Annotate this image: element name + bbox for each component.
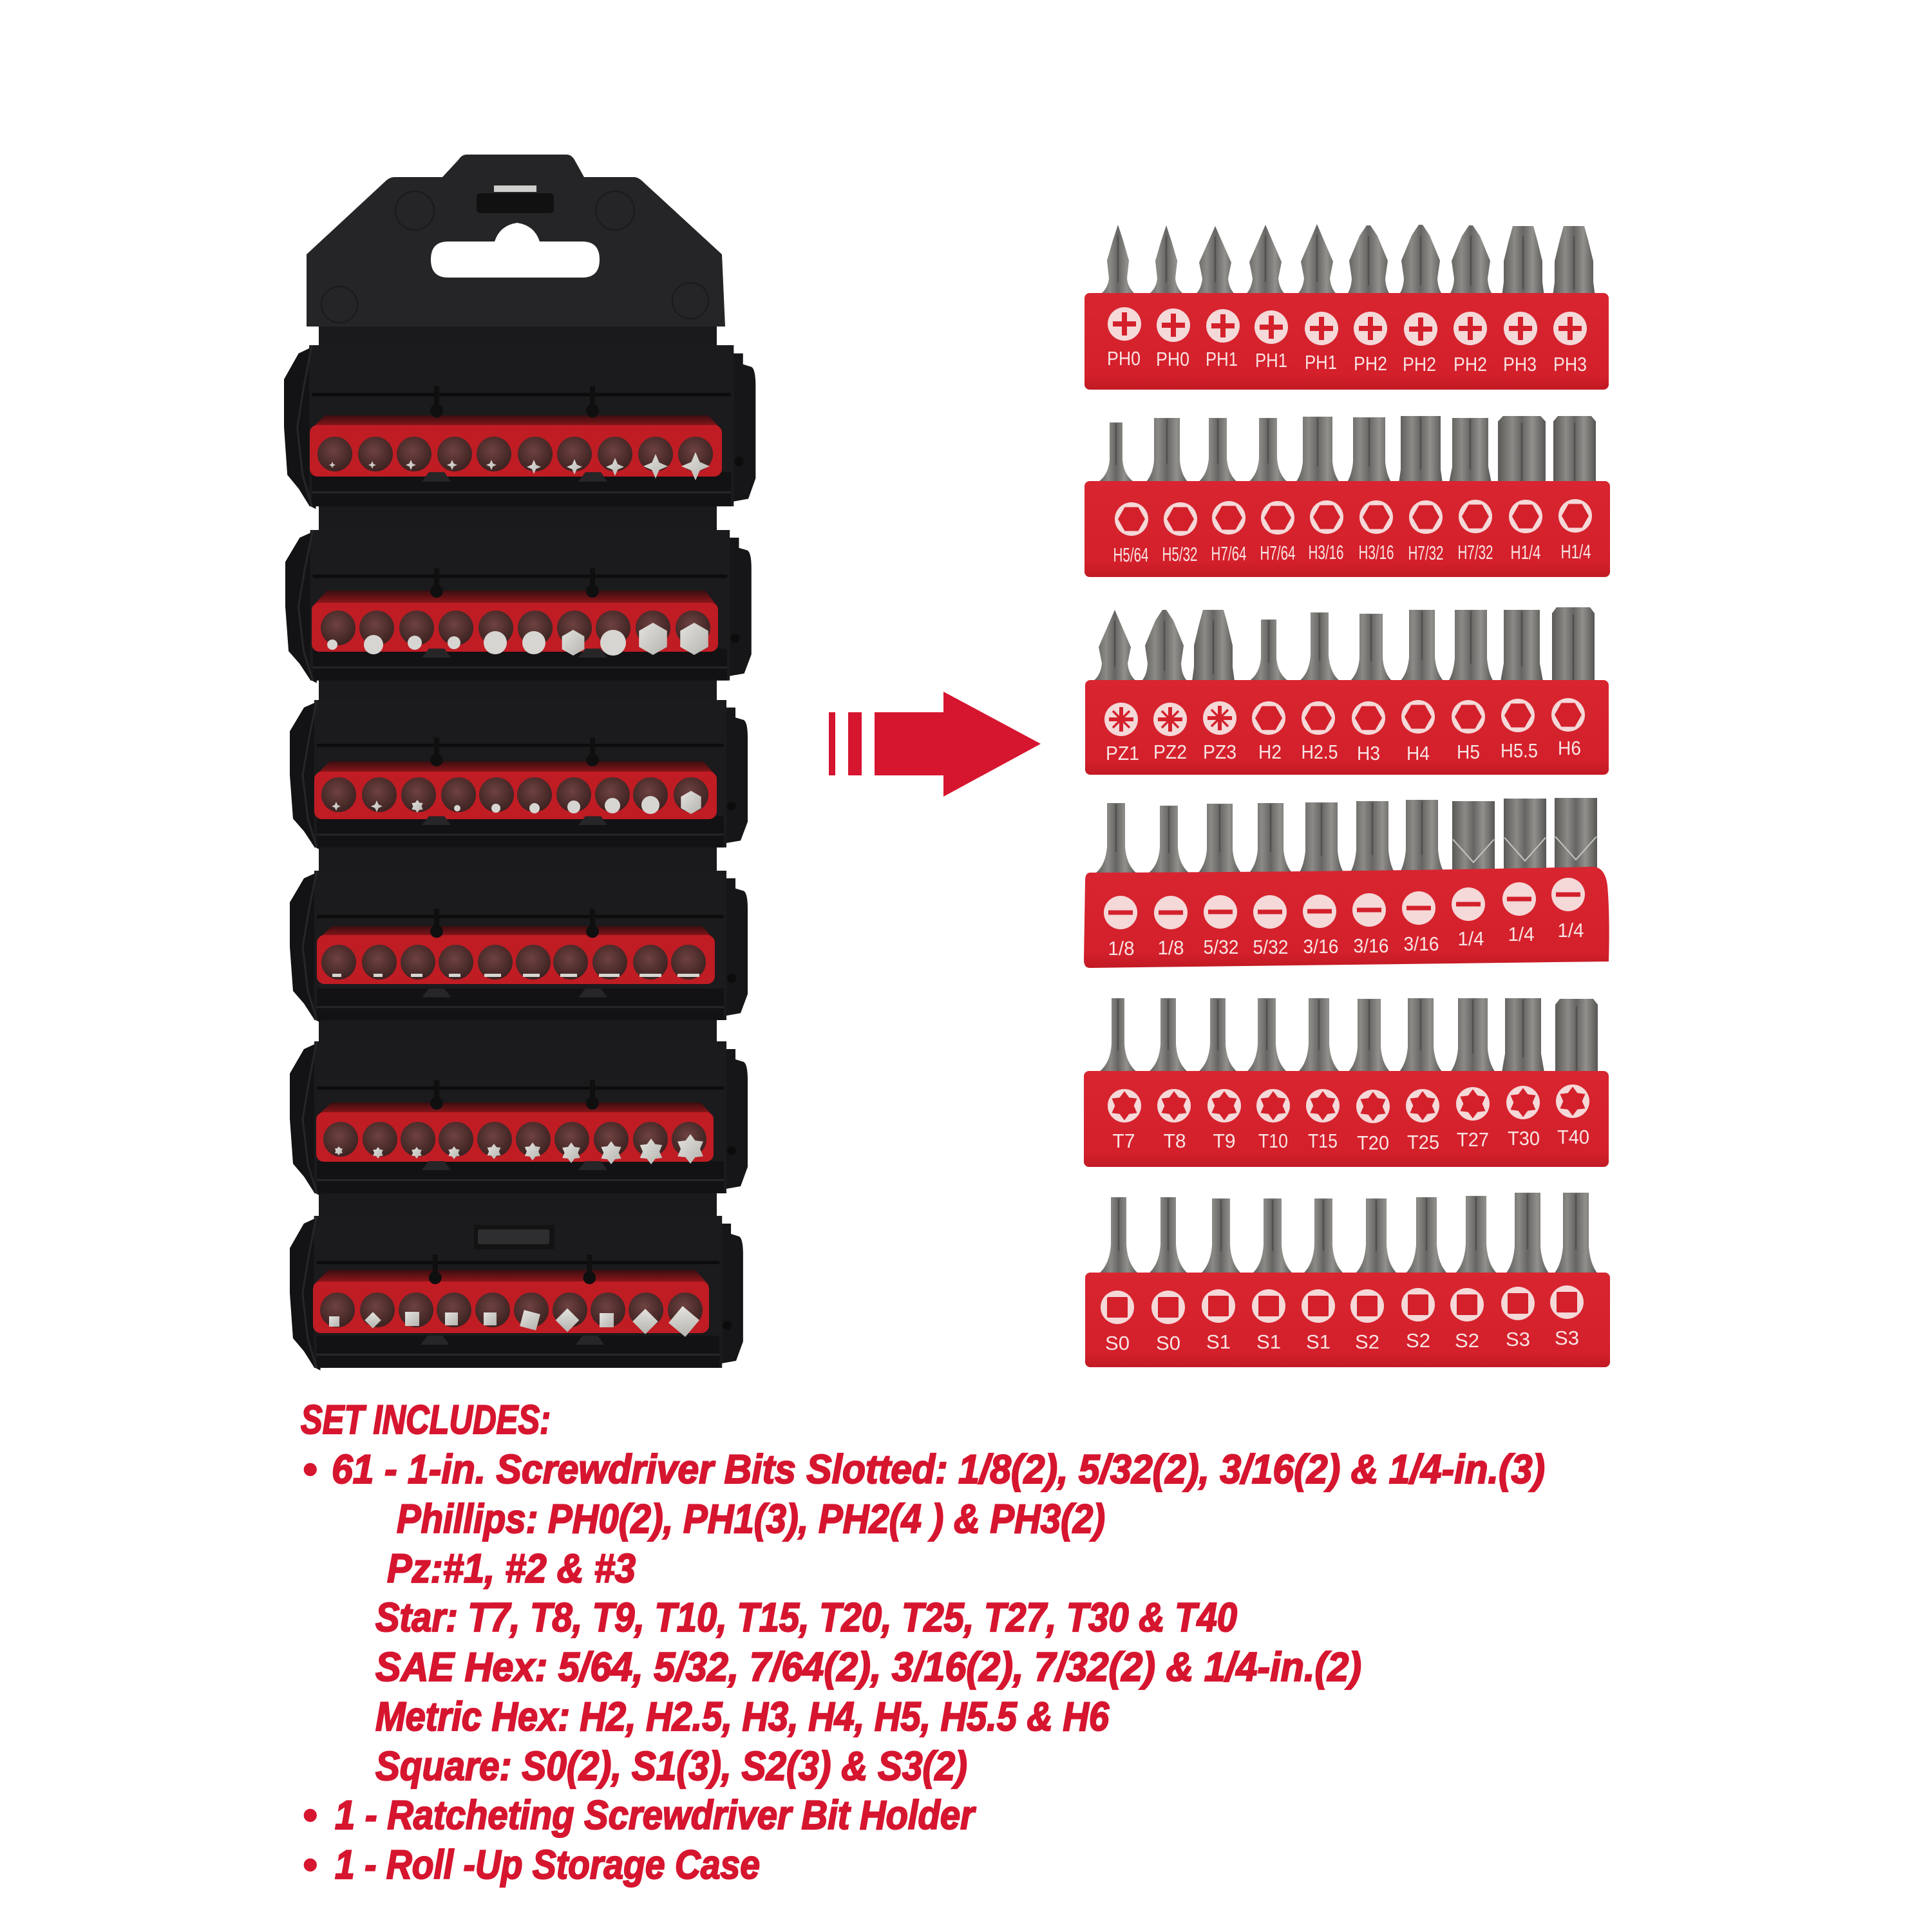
size labels: H5.5 [1501, 739, 1538, 762]
size labels: 5/32 [1253, 936, 1288, 958]
case module 5: star [290, 1041, 748, 1196]
size labels: S1 [1306, 1331, 1331, 1353]
slotted bits [1095, 798, 1597, 873]
star bits [1099, 998, 1598, 1072]
item: square: Square: S0(2), S1(3), S2(3) & S3(2) [375, 1744, 967, 1789]
size labels: PH0 [1107, 347, 1141, 370]
size labels: H7/64 [1260, 542, 1296, 564]
size labels: T25 [1407, 1131, 1439, 1153]
panel: roll-up storage case with bits [284, 155, 755, 1370]
size labels: S3 [1555, 1327, 1579, 1349]
square icons [1101, 1285, 1584, 1324]
size labels: T7 [1113, 1130, 1135, 1152]
arrow [829, 692, 1041, 797]
item: Phillips: Phillips: PH0(2), PH1(3), PH2(4 ) & PH3(2) [397, 1497, 1105, 1542]
item: SAE hex: SAE Hex: 5/64, 5/32, 7/64(2), 3/16(2), 7/32(2) & 1/4-in.(2) [375, 1645, 1361, 1690]
size labels: H2 [1258, 741, 1282, 763]
size labels: 3/16 [1303, 935, 1338, 958]
size labels [1106, 737, 1581, 764]
red holder [1084, 293, 1609, 390]
size labels: 5/32 [1203, 936, 1239, 958]
size labels: 3/16 [1354, 934, 1388, 957]
size labels: H4 [1406, 742, 1430, 764]
size labels: T30 [1508, 1127, 1540, 1150]
size labels: PH1 [1305, 351, 1337, 374]
size labels [1107, 347, 1587, 375]
size labels: H6 [1558, 737, 1581, 759]
size labels: H3 [1357, 742, 1380, 764]
red holder [1084, 1071, 1609, 1167]
size labels: PH2 [1354, 352, 1387, 375]
slot icons [1104, 878, 1585, 929]
Pozi and metric hex bits [1093, 607, 1595, 681]
size labels: PH2 [1454, 353, 1487, 375]
size labels: T8 [1163, 1130, 1186, 1152]
size labels: T15 [1308, 1130, 1338, 1152]
size labels: 1/4 [1458, 927, 1484, 950]
size labels [1113, 1126, 1589, 1154]
hanging tab [307, 155, 725, 327]
size labels: S0 [1105, 1332, 1130, 1354]
size labels: T10 [1258, 1130, 1288, 1152]
size labels [1108, 919, 1584, 960]
rear spine strip [319, 319, 717, 1356]
size labels: PH0 [1156, 348, 1189, 370]
item: metric hex: Metric Hex: H2, H2.5, H3, H4, H5, H5.5 & H6 [375, 1694, 1110, 1739]
size labels: T40 [1557, 1126, 1589, 1148]
item: star: Star: T7, T8, T9, T10, T15, T20, T25, T27, T30 & T40 [375, 1595, 1237, 1640]
size labels: PH2 [1403, 353, 1436, 375]
item: screwdriver bits slotted: 61 - 1-in. Screwdriver Bits Slotted: 1/8(2), 5/32(2), 3/16(2) & 1/4-in.(3) [332, 1447, 1545, 1492]
size labels: S1 [1206, 1331, 1231, 1353]
panel: slotted bit strip [1084, 798, 1609, 968]
item: Pozi: Pz:#1, #2 & #3 [387, 1546, 636, 1591]
size labels: PZ2 [1153, 741, 1187, 763]
size labels: H7/32 [1458, 541, 1493, 564]
size labels [1113, 540, 1591, 566]
case module 6: square [290, 1216, 743, 1370]
size labels: H5 [1457, 741, 1480, 763]
text block: set includes [301, 1397, 1545, 1888]
panel: star bit strip [1084, 998, 1609, 1167]
item: bit holder: 1 - Ratcheting Screwdriver Bit Holder [335, 1793, 976, 1838]
size labels: T20 [1357, 1132, 1389, 1154]
size labels: PH1 [1206, 348, 1238, 370]
size labels: H5/64 [1113, 544, 1149, 566]
size labels: H7/32 [1408, 542, 1444, 564]
size labels: H3/16 [1359, 541, 1394, 564]
size labels: S0 [1156, 1332, 1180, 1354]
case module 2: SAE hex [285, 530, 752, 683]
SAE hex bits [1097, 416, 1596, 483]
panel: square bit strip [1085, 1193, 1610, 1367]
case module 4: slotted [290, 871, 748, 1023]
size labels: H3/16 [1309, 541, 1343, 564]
size labels: PZ3 [1203, 741, 1236, 763]
item: bit holder: • [303, 1793, 317, 1838]
red holder [1084, 481, 1610, 577]
size labels [1105, 1327, 1579, 1354]
case module 1: Phillips [284, 345, 755, 509]
case module 3: Pozi and metric hex [290, 700, 748, 850]
size labels: H2.5 [1301, 741, 1338, 763]
red holder [1085, 680, 1609, 775]
panel: Pozi and metric hex bit strip [1085, 607, 1609, 775]
size labels: 3/16 [1404, 933, 1439, 955]
Pozi and hex icons [1104, 698, 1585, 736]
size labels: H5/32 [1162, 543, 1198, 565]
size labels: PZ1 [1106, 742, 1139, 764]
star icons [1108, 1084, 1589, 1123]
size labels: PH3 [1503, 353, 1537, 375]
size labels: H7/64 [1211, 542, 1247, 565]
size labels: T9 [1213, 1130, 1235, 1152]
item: screwdriver bits slotted: • [303, 1447, 317, 1492]
size labels: PH1 [1255, 349, 1287, 372]
panel: SAE hex bit strip [1084, 416, 1610, 577]
Phillips bits [1097, 224, 1595, 296]
hex icons [1115, 499, 1592, 536]
size labels: H1/4 [1561, 540, 1591, 563]
size labels: T27 [1457, 1128, 1489, 1151]
red holder [1085, 1273, 1610, 1367]
red holder [1084, 867, 1609, 968]
size labels: 1/8 [1158, 936, 1184, 959]
square bits [1099, 1193, 1598, 1274]
size labels: 1/4 [1557, 919, 1584, 942]
item: storage case: • [303, 1842, 317, 1888]
size labels: 1/8 [1108, 937, 1135, 960]
size labels: 1/4 [1508, 923, 1534, 945]
size labels: S3 [1506, 1328, 1530, 1350]
size labels: S2 [1455, 1329, 1479, 1352]
size labels: S2 [1406, 1329, 1430, 1352]
cross icons [1108, 307, 1587, 346]
size labels: H1/4 [1511, 541, 1540, 564]
size labels: PH3 [1553, 353, 1587, 375]
panel: Phillips bit strip [1084, 224, 1609, 390]
size labels: S2 [1355, 1331, 1379, 1353]
heading: SET INCLUDES: [301, 1397, 551, 1443]
size labels: S1 [1256, 1331, 1281, 1353]
item: storage case: 1 - Roll -Up Storage Case [335, 1842, 760, 1888]
